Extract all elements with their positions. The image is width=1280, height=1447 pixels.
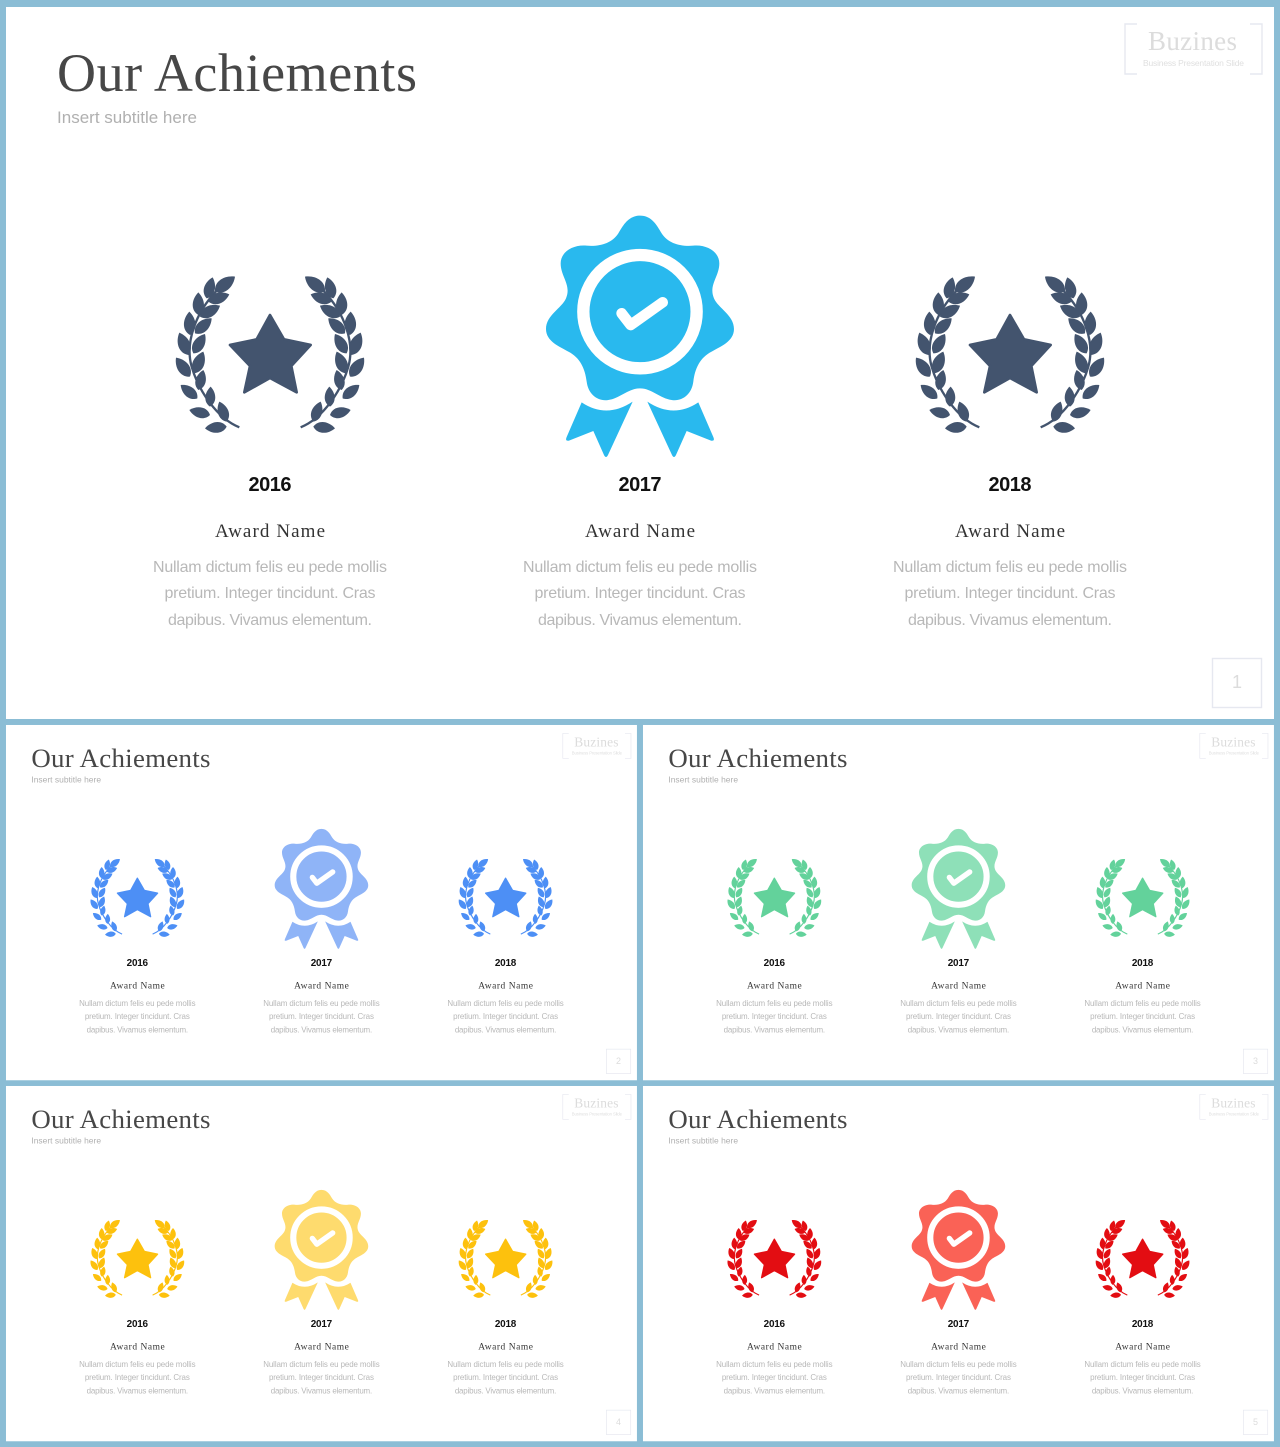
award column 2016 xyxy=(79,958,196,1034)
award column 2017: pretium. Integer tincidunt. Cras xyxy=(269,1012,374,1021)
award column 2018: dapibus. Vivamus elementum. xyxy=(908,612,1112,629)
logo: Business Presentation Slide xyxy=(572,1111,623,1116)
award column 2017: pretium. Integer tincidunt. Cras xyxy=(534,585,746,602)
award column 2016: pretium. Integer tincidunt. Cras xyxy=(722,1373,827,1382)
icon: laurel star 2018 xyxy=(456,857,555,937)
award column 2017 xyxy=(900,958,1017,1034)
icon: rosette badge 2017 xyxy=(546,216,734,457)
logo: Business Presentation Slide xyxy=(1209,1111,1260,1116)
award column 2018: Award Name xyxy=(1115,982,1170,992)
panel background xyxy=(6,7,1274,719)
title: Our Achiements xyxy=(31,1104,210,1134)
icon: laurel star 2018 xyxy=(1093,857,1192,937)
award column 2016: dapibus. Vivamus elementum. xyxy=(87,1025,188,1034)
award column 2017 xyxy=(900,1319,1017,1396)
logo: Buzines xyxy=(1211,1095,1256,1110)
slide 5: red xyxy=(643,1086,1274,1441)
award column 2016: pretium. Integer tincidunt. Cras xyxy=(164,585,376,602)
award column 2016: 2016 xyxy=(764,958,786,969)
award column 2018: 2018 xyxy=(1132,958,1154,969)
award column 2018: Nullam dictum felis eu pede mollis xyxy=(447,999,564,1008)
award column 2016: 2016 xyxy=(764,1319,786,1330)
award column 2016: Nullam dictum felis eu pede mollis xyxy=(153,559,387,576)
award column 2018 xyxy=(1084,958,1201,1034)
award column 2016: Nullam dictum felis eu pede mollis xyxy=(79,999,196,1008)
icon: laurel star 2018 xyxy=(456,1218,555,1298)
icon: laurel star 2016 xyxy=(88,857,186,937)
award column 2018 xyxy=(447,958,564,1034)
icon: laurel star 2016 xyxy=(171,272,369,434)
icon: rosette badge 2017 xyxy=(912,829,1005,949)
award column 2018: 2018 xyxy=(1132,1319,1154,1330)
title: Our Achiements xyxy=(57,43,417,103)
award column 2018: pretium. Integer tincidunt. Cras xyxy=(1090,1012,1195,1021)
logo: Buzines xyxy=(1211,734,1256,749)
title: Our Achiements xyxy=(668,743,847,773)
award column 2018: dapibus. Vivamus elementum. xyxy=(1092,1386,1193,1395)
award column 2016: Award Name xyxy=(747,982,802,992)
award column 2017: pretium. Integer tincidunt. Cras xyxy=(906,1012,1011,1021)
award column 2017 xyxy=(523,474,757,629)
award column 2017: dapibus. Vivamus elementum. xyxy=(271,1025,372,1034)
award column 2017: 2017 xyxy=(948,1319,970,1330)
award column 2016: Nullam dictum felis eu pede mollis xyxy=(79,1360,196,1369)
award column 2017: Award Name xyxy=(931,982,986,992)
award column 2017: 2017 xyxy=(618,474,662,496)
subtitle: Insert subtitle here xyxy=(668,1136,738,1146)
page number: 4 xyxy=(616,1417,621,1427)
award column 2018: Nullam dictum felis eu pede mollis xyxy=(447,1360,564,1369)
page number: 2 xyxy=(616,1056,621,1066)
award column 2016: Nullam dictum felis eu pede mollis xyxy=(716,999,833,1008)
logo: Buzines xyxy=(1148,26,1237,56)
award column 2017: dapibus. Vivamus elementum. xyxy=(908,1386,1009,1395)
page number xyxy=(606,1049,631,1074)
award column 2018: 2018 xyxy=(988,474,1032,496)
award column 2018: Award Name xyxy=(478,982,533,992)
slide 1: navy and sky blue xyxy=(6,7,1274,719)
award column 2016 xyxy=(79,1319,196,1396)
icon: rosette badge 2017 xyxy=(275,1190,368,1310)
award column 2018: 2018 xyxy=(495,1319,517,1330)
award column 2017: 2017 xyxy=(311,1319,333,1330)
panel background xyxy=(643,1086,1274,1441)
logo xyxy=(1200,733,1268,758)
award column 2016: pretium. Integer tincidunt. Cras xyxy=(85,1012,190,1021)
award column 2017: Award Name xyxy=(931,1343,986,1353)
award column 2017: dapibus. Vivamus elementum. xyxy=(271,1386,372,1395)
award column 2018: dapibus. Vivamus elementum. xyxy=(455,1386,556,1395)
award column 2018: pretium. Integer tincidunt. Cras xyxy=(1090,1373,1195,1382)
slide 4: yellow xyxy=(6,1086,637,1441)
award column 2017 xyxy=(263,1319,380,1396)
panel background xyxy=(6,725,637,1080)
award column 2016 xyxy=(716,958,833,1034)
award column 2018: pretium. Integer tincidunt. Cras xyxy=(904,585,1116,602)
page number: 3 xyxy=(1253,1056,1258,1066)
award column 2018: pretium. Integer tincidunt. Cras xyxy=(453,1373,558,1382)
award column 2016: dapibus. Vivamus elementum. xyxy=(724,1025,825,1034)
logo xyxy=(563,1094,631,1119)
award column 2016: dapibus. Vivamus elementum. xyxy=(168,612,372,629)
icon: laurel star 2018 xyxy=(911,272,1109,434)
award column 2016: dapibus. Vivamus elementum. xyxy=(87,1386,188,1395)
logo xyxy=(1125,24,1262,74)
page number: 1 xyxy=(1232,672,1242,692)
award column 2016: Award Name xyxy=(215,521,325,542)
award column 2016: 2016 xyxy=(127,1319,149,1330)
page number xyxy=(606,1410,631,1435)
award column 2018: 2018 xyxy=(495,958,517,969)
award column 2017: Nullam dictum felis eu pede mollis xyxy=(263,1360,380,1369)
logo xyxy=(1200,1094,1268,1119)
award column 2018 xyxy=(1084,1319,1201,1396)
award column 2016: pretium. Integer tincidunt. Cras xyxy=(85,1373,190,1382)
logo: Business Presentation Slide xyxy=(1209,750,1260,755)
award column 2017: 2017 xyxy=(311,958,333,969)
award column 2018: Nullam dictum felis eu pede mollis xyxy=(1084,999,1201,1008)
award column 2017: dapibus. Vivamus elementum. xyxy=(538,612,742,629)
award column 2017: pretium. Integer tincidunt. Cras xyxy=(906,1373,1011,1382)
icon: laurel star 2016 xyxy=(725,1218,823,1298)
subtitle: Insert subtitle here xyxy=(31,1136,101,1146)
award column 2016: Award Name xyxy=(110,1343,165,1353)
award column 2017: Award Name xyxy=(585,521,695,542)
icon: laurel star 2016 xyxy=(88,1218,186,1298)
award column 2018: Nullam dictum felis eu pede mollis xyxy=(893,559,1127,576)
slide 3: green xyxy=(643,725,1274,1080)
award column 2017: Nullam dictum felis eu pede mollis xyxy=(523,559,757,576)
award column 2018: Award Name xyxy=(1115,1343,1170,1353)
page number: 5 xyxy=(1253,1417,1258,1427)
award column 2016: dapibus. Vivamus elementum. xyxy=(724,1386,825,1395)
award column 2016: Award Name xyxy=(110,982,165,992)
icon: rosette badge 2017 xyxy=(275,829,368,949)
award column 2016 xyxy=(153,474,387,629)
award column 2018 xyxy=(893,474,1127,629)
award column 2018: dapibus. Vivamus elementum. xyxy=(1092,1025,1193,1034)
award column 2017: pretium. Integer tincidunt. Cras xyxy=(269,1373,374,1382)
panel background xyxy=(643,725,1274,1080)
panel background xyxy=(6,1086,637,1441)
award column 2017 xyxy=(263,958,380,1034)
award column 2018: Award Name xyxy=(478,1343,533,1353)
slide 2: blue xyxy=(6,725,637,1080)
award column 2018: Award Name xyxy=(955,521,1065,542)
award column 2016: Award Name xyxy=(747,1343,802,1353)
award column 2017: Nullam dictum felis eu pede mollis xyxy=(900,999,1017,1008)
icon: laurel star 2016 xyxy=(725,857,823,937)
award column 2016: Nullam dictum felis eu pede mollis xyxy=(716,1360,833,1369)
award column 2017: Nullam dictum felis eu pede mollis xyxy=(263,999,380,1008)
award column 2017: Award Name xyxy=(294,982,349,992)
award column 2018 xyxy=(447,1319,564,1396)
page number xyxy=(1243,1410,1268,1435)
icon: laurel star 2018 xyxy=(1093,1218,1192,1298)
award column 2017: dapibus. Vivamus elementum. xyxy=(908,1025,1009,1034)
award column 2018: Nullam dictum felis eu pede mollis xyxy=(1084,1360,1201,1369)
subtitle: Insert subtitle here xyxy=(31,775,101,785)
award column 2017: Award Name xyxy=(294,1343,349,1353)
logo: Buzines xyxy=(574,1095,619,1110)
award column 2016: pretium. Integer tincidunt. Cras xyxy=(722,1012,827,1021)
award column 2016: 2016 xyxy=(248,474,292,496)
logo: Buzines xyxy=(574,734,619,749)
icon: rosette badge 2017 xyxy=(912,1190,1005,1310)
award column 2016: 2016 xyxy=(127,958,149,969)
logo xyxy=(563,733,631,758)
subtitle: Insert subtitle here xyxy=(668,775,738,785)
award column 2017: 2017 xyxy=(948,958,970,969)
page number xyxy=(1212,658,1262,708)
award column 2017: Nullam dictum felis eu pede mollis xyxy=(900,1360,1017,1369)
award column 2018: dapibus. Vivamus elementum. xyxy=(455,1025,556,1034)
award column 2018: pretium. Integer tincidunt. Cras xyxy=(453,1012,558,1021)
title: Our Achiements xyxy=(668,1104,847,1134)
title: Our Achiements xyxy=(31,743,210,773)
logo: Business Presentation Slide xyxy=(1143,58,1244,68)
subtitle: Insert subtitle here xyxy=(57,108,197,127)
award column 2016 xyxy=(716,1319,833,1396)
logo: Business Presentation Slide xyxy=(572,750,623,755)
page number xyxy=(1243,1049,1268,1074)
